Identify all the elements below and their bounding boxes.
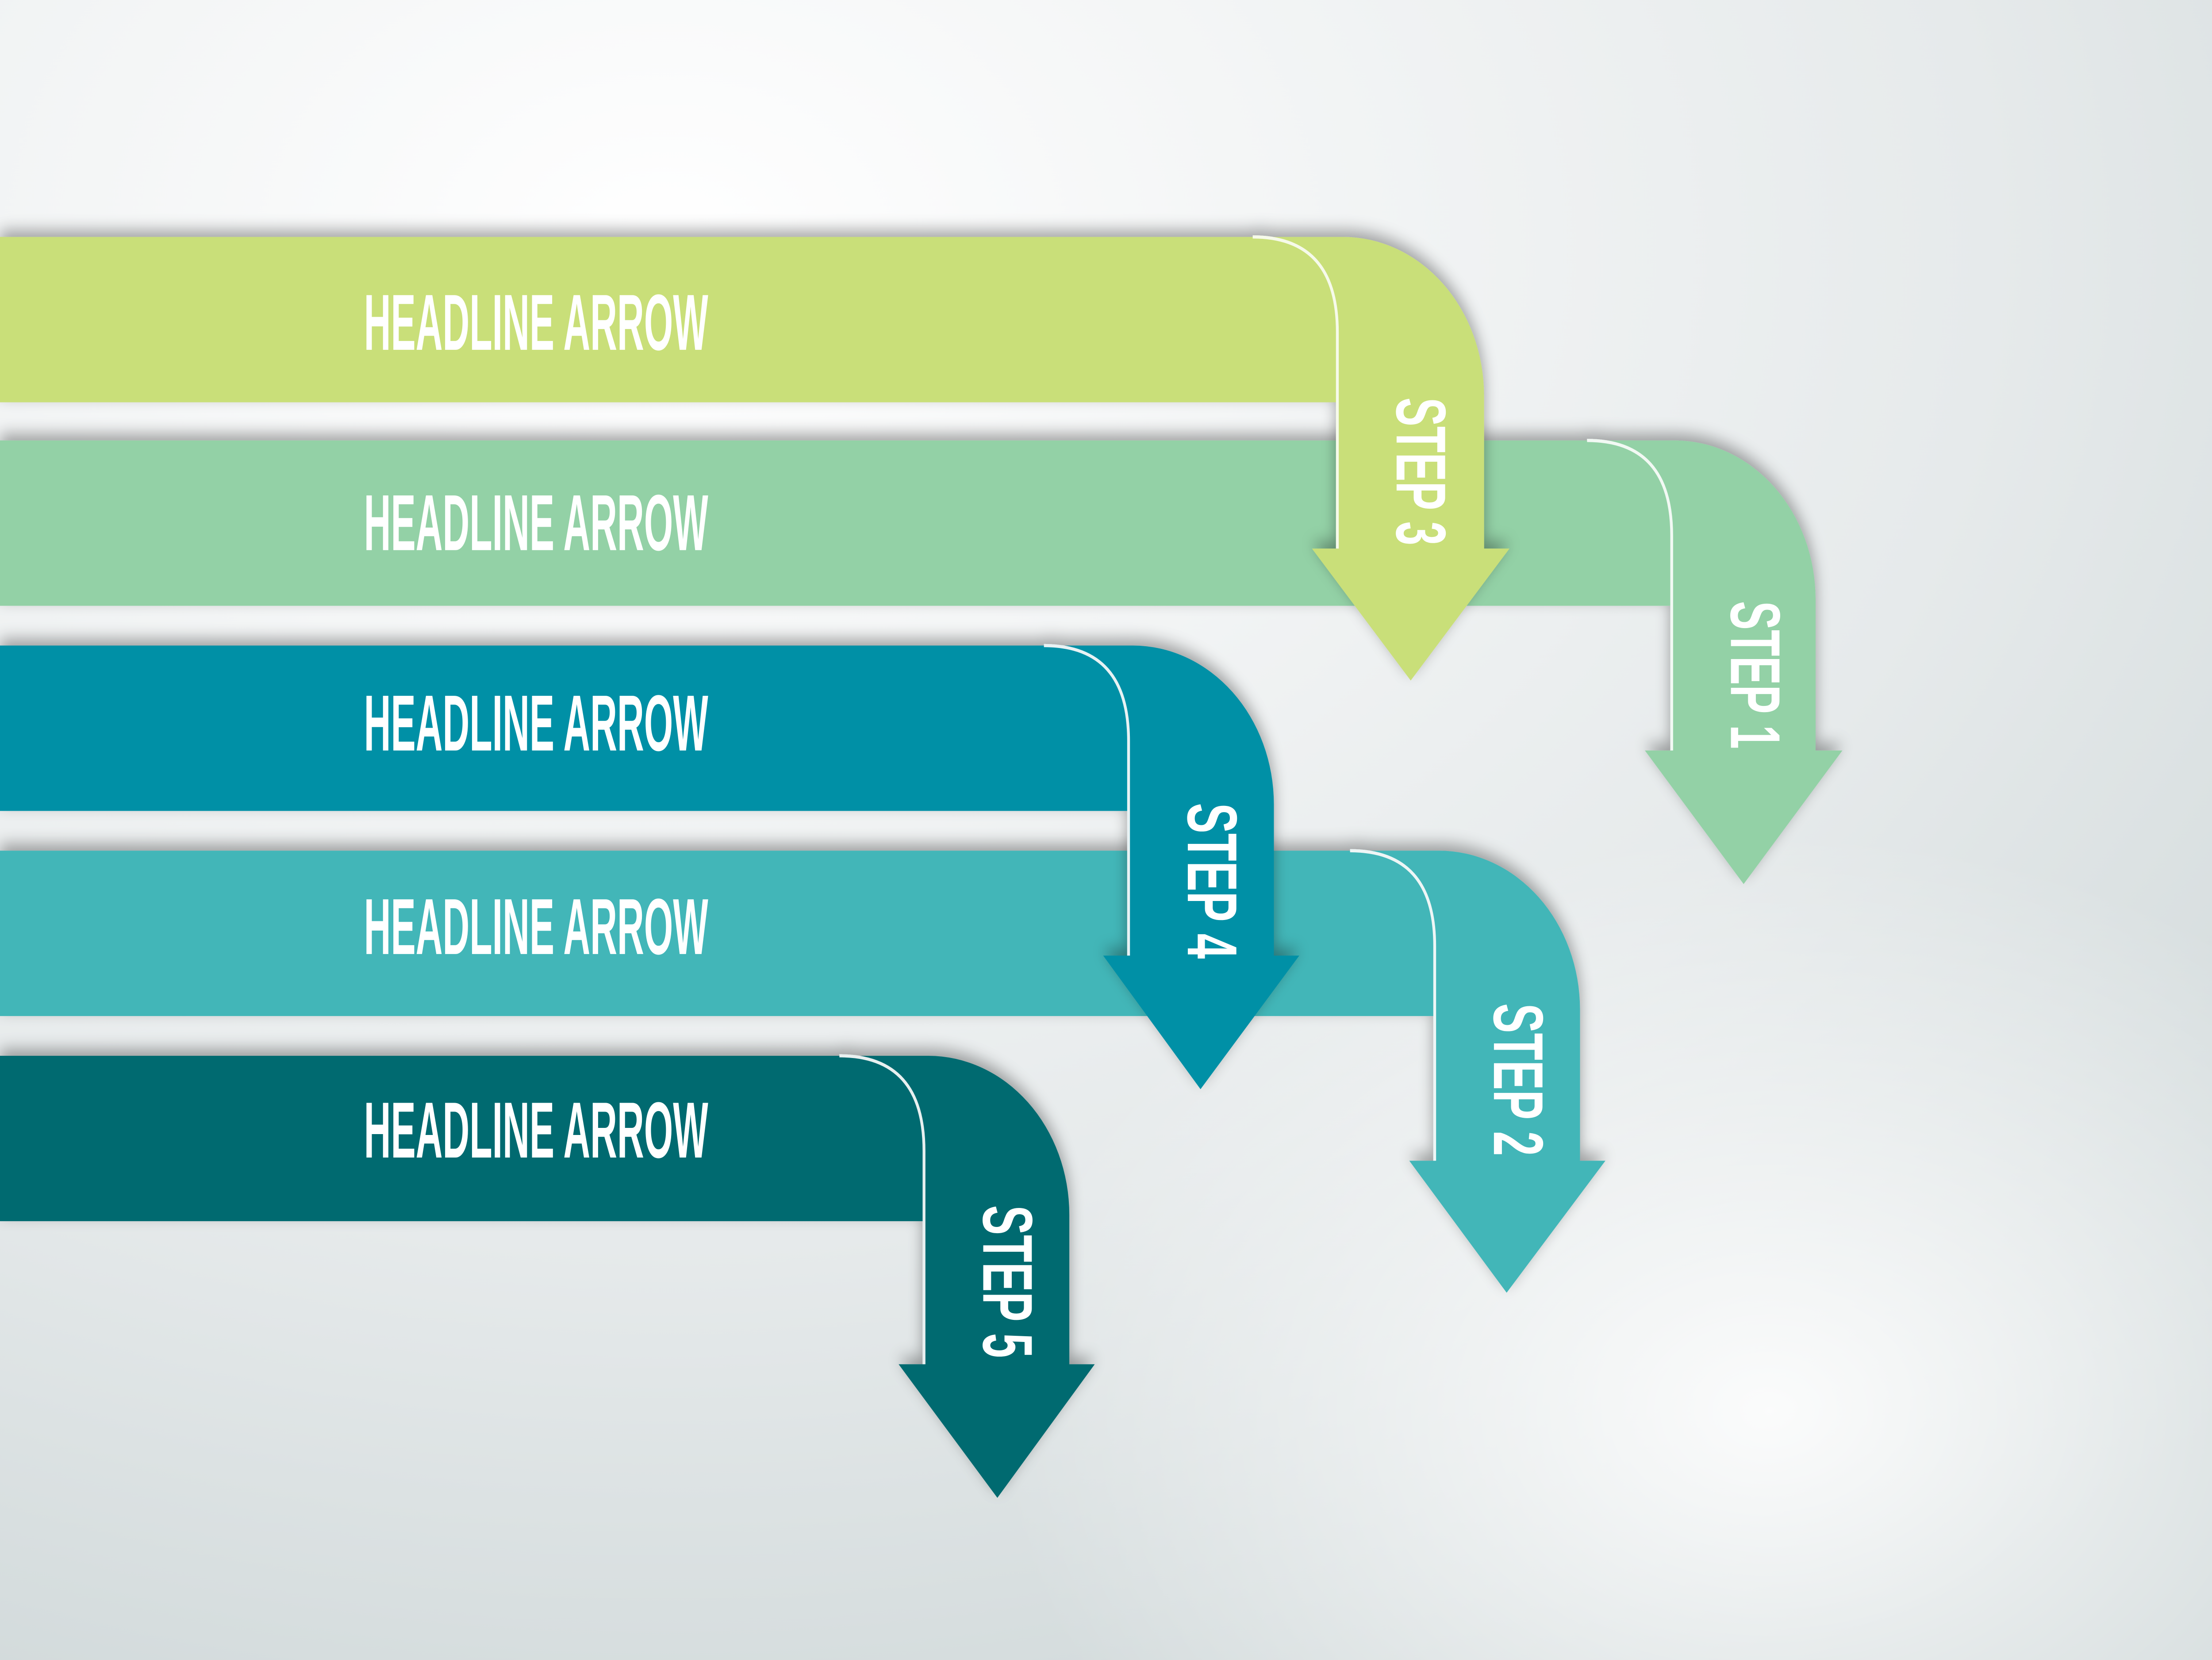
band 3: headline arrow step 4: HEADLINE ARROW bbox=[364, 679, 708, 768]
band 1: headline arrow step 3: HEADLINE ARROW bbox=[364, 278, 708, 367]
band 1: headline arrow step 3 bbox=[0, 237, 1509, 681]
band 4: headline arrow step 2 bbox=[0, 851, 1605, 1293]
label: step 4: STEP 4 bbox=[1172, 803, 1252, 959]
band 2: headline arrow step 1: HEADLINE ARROW bbox=[364, 479, 708, 567]
band 3: headline arrow step 4 bbox=[0, 646, 1299, 1089]
band 5: headline arrow step 5: HEADLINE ARROW bbox=[364, 1086, 708, 1175]
band 4: headline arrow step 2: HEADLINE ARROW bbox=[364, 882, 708, 971]
band 2: headline arrow step 1 bbox=[0, 441, 1843, 884]
label: step 2: STEP 2 bbox=[1479, 1003, 1557, 1156]
label: step 5: STEP 5 bbox=[968, 1205, 1047, 1358]
label: step 1: STEP 1 bbox=[1716, 601, 1794, 749]
band 5: headline arrow step 5 bbox=[0, 1056, 1094, 1498]
label: step 3: STEP 3 bbox=[1381, 398, 1460, 545]
